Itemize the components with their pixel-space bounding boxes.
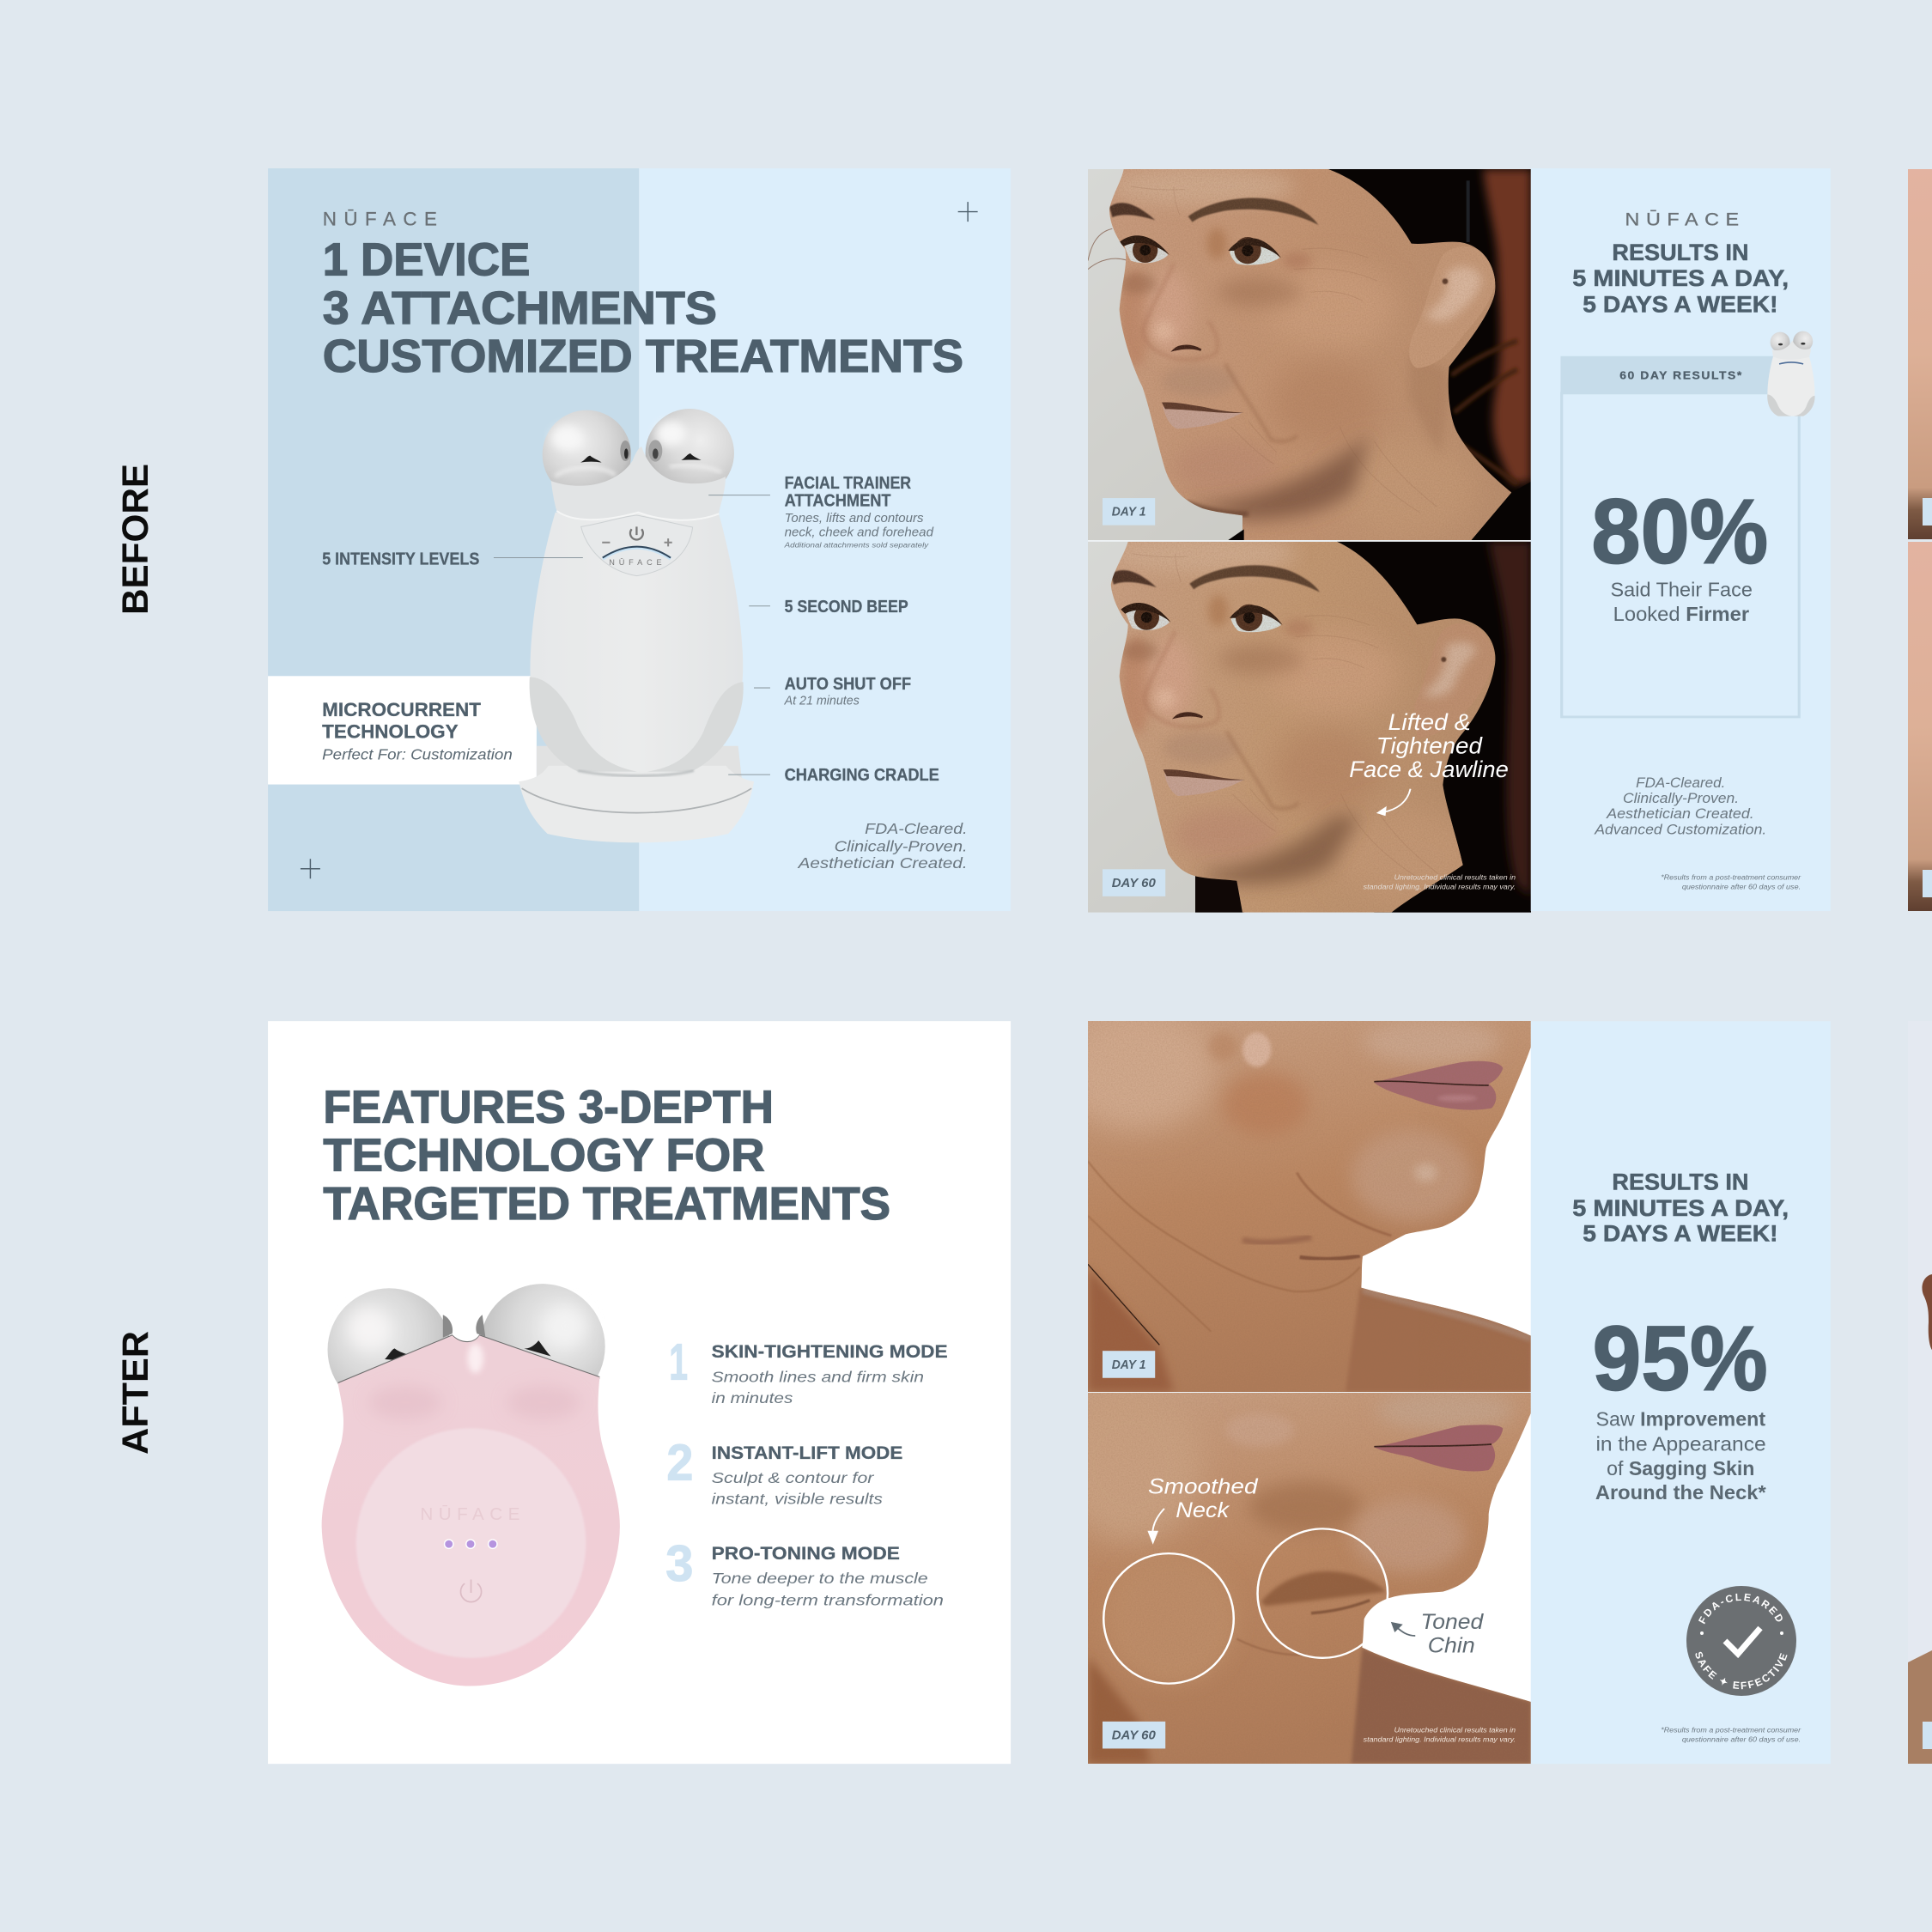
label: facial trainer attachment: neck, cheek and forehead [785, 525, 934, 539]
text: claims [1594, 775, 1766, 837]
logo: NŪFACE [323, 209, 437, 230]
device: pink mini: NŪFACE [420, 1504, 519, 1524]
mode 2: instant, visible results [712, 1491, 883, 1508]
mode 3 [665, 1534, 944, 1608]
circle: chin [1258, 1528, 1388, 1658]
photo: day 60 neck [1060, 1387, 1531, 1764]
label: charging cradle: CHARGING CRADLE [785, 766, 939, 785]
callout: toned chin: Toned [1421, 1609, 1484, 1634]
label: facial trainer attachment: Additional attachments sold separately [783, 540, 929, 549]
text: claims: Clinically-Proven. [1623, 790, 1739, 806]
mode 3: PRO-TONING MODE [712, 1544, 900, 1564]
callout: lifted and tightened: Face & Jawline [1349, 756, 1509, 782]
label: facial trainer attachment: FACIAL TRAINER [785, 474, 912, 493]
stat: 80 percent: 80% [1591, 479, 1768, 582]
label: auto shut off: AUTO SHUT OFF [785, 675, 911, 694]
panel: before photo overlays and sidebar [1103, 168, 1831, 911]
text: fda claims: FDA-Cleared. [865, 820, 968, 837]
heading: RESULTS IN [1612, 240, 1748, 265]
tag: day 60 [1103, 1722, 1165, 1748]
callout: lifted and tightened [1349, 709, 1509, 782]
tag: day 1 [1103, 1351, 1155, 1378]
arrow: to chin [1391, 1622, 1415, 1636]
mode 2: 2 [666, 1434, 693, 1492]
sidebar: 95 percent results [1531, 1021, 1831, 1764]
text: stat caption [1595, 1408, 1766, 1504]
stat: 95 percent: 95% [1593, 1306, 1768, 1409]
label: facial trainer attachment [783, 474, 934, 549]
label: facial trainer attachment: ATTACHMENT [785, 491, 891, 510]
divider behind photos [1088, 169, 1531, 912]
text: footnote [1661, 873, 1801, 890]
panel: cropped next column top photo [1908, 169, 1932, 911]
arrow: to jawline [1376, 789, 1411, 816]
label: before: BEFORE [115, 464, 156, 615]
heading: TARGETED TREATMENTS [323, 1179, 890, 1230]
heading: 5 DAYS A WEEK! [1583, 292, 1778, 318]
panel: before device features [268, 168, 1011, 911]
callout: lifted and tightened: Lifted & [1388, 709, 1471, 735]
mode 1 [669, 1333, 948, 1406]
device: white trainer with cradle [519, 409, 754, 842]
results band [1560, 356, 1800, 393]
callout: smoothed neck: Neck [1176, 1498, 1230, 1522]
mode 2: INSTANT-LIFT MODE [712, 1443, 902, 1463]
callout: toned chin: Chin [1428, 1633, 1475, 1657]
text: fda claims [798, 820, 968, 872]
tag: day 1: DAY 1 [1112, 1358, 1145, 1372]
callout: smoothed neck: Smoothed [1148, 1474, 1259, 1498]
tag: day 60: DAY 60 [1112, 1728, 1156, 1742]
mode 3: Tone deeper to the muscle [712, 1570, 928, 1587]
mode 1: 1 [669, 1333, 688, 1390]
device: small trainer [1767, 331, 1815, 416]
mode 3: 3 [665, 1534, 693, 1592]
heading [1572, 1170, 1789, 1247]
results band: 60 DAY RESULTS* [1619, 369, 1742, 382]
heading [323, 1082, 890, 1230]
label: after: AFTER [115, 1331, 156, 1455]
icon: plus top right [958, 202, 978, 222]
results box [1562, 393, 1799, 717]
label: 5 second beep: 5 SECOND BEEP [785, 598, 908, 617]
text: photo disclaimer: standard lighting. Individual results may vary. [1364, 1735, 1516, 1743]
panel: cropped next column bottom photo [1908, 1021, 1932, 1764]
label: auto shut off: At 21 minutes [784, 694, 860, 708]
heading: 3 ATTACHMENTS [323, 283, 717, 334]
heading: 1 DEVICE [323, 235, 530, 286]
tag: day 1 [1103, 498, 1155, 526]
badge: fda-cleared safe and effective [1686, 1586, 1796, 1696]
divider behind neck photos [1088, 1021, 1531, 1764]
photo: day 1 neck [1060, 1010, 1531, 1392]
text: stat caption [1611, 579, 1753, 626]
callout: lifted and tightened: Tightened [1376, 733, 1483, 758]
text: fda claims: Aesthetician Created. [798, 854, 968, 872]
mode 1: Smooth lines and firm skin [712, 1368, 924, 1385]
heading: FEATURES 3-DEPTH [323, 1082, 774, 1133]
heading [323, 235, 963, 382]
text: claims: FDA-Cleared. [1636, 775, 1725, 791]
text: microcurrent technology: Perfect For: Customization [322, 745, 513, 762]
panel: after device modes [268, 1021, 1011, 1764]
text: stat caption: of Sagging Skin [1607, 1458, 1754, 1480]
circle: neck [1103, 1553, 1234, 1684]
text: footnote: questionnaire after 60 days of use. [1682, 883, 1801, 890]
text: stat caption: Around the Neck* [1595, 1482, 1766, 1504]
heading: 5 MINUTES A DAY, [1572, 265, 1789, 292]
text: microcurrent technology: MICROCURRENT [322, 699, 481, 720]
text: photo disclaimer: Unretouched clinical results taken in [1394, 873, 1516, 881]
heading: 5 MINUTES A DAY, [1572, 1195, 1789, 1222]
text: photo disclaimer [1364, 873, 1516, 890]
tag: day 60: DAY 60 [1112, 877, 1156, 890]
tag: day 1: DAY 1 [1112, 505, 1145, 519]
callout: smoothed neck [1148, 1474, 1259, 1522]
device: white trainer with cradle: NŪFACE [609, 558, 662, 567]
text: stat caption: Looked Firmer [1613, 604, 1749, 626]
text: microcurrent technology: TECHNOLOGY [322, 721, 459, 743]
text: stat caption: Said Their Face [1611, 579, 1753, 601]
heading [1572, 240, 1789, 318]
text: microcurrent technology [322, 699, 513, 762]
photo: day 1 face [1088, 167, 1531, 540]
sidebar: 80 percent results [1531, 168, 1831, 911]
panel: after photo overlays and sidebar [1103, 1021, 1831, 1764]
mode 1: SKIN-TIGHTENING MODE [712, 1342, 948, 1362]
heading: RESULTS IN [1612, 1170, 1748, 1195]
mode 2 [666, 1434, 902, 1508]
text: claims: Advanced Customization. [1594, 821, 1766, 837]
label: facial trainer attachment: Tones, lifts and contours [785, 511, 924, 526]
device: pink mini [322, 1284, 620, 1686]
text: photo disclaimer: standard lighting. Individual results may vary. [1364, 883, 1516, 890]
photo: day 60 face [1088, 533, 1531, 913]
badge: fda-cleared safe and effective: FDA-CLEARED [1698, 1594, 1783, 1625]
mode 2: Sculpt & contour for [712, 1469, 875, 1486]
callout lines [494, 495, 770, 775]
mode 3: for long-term transformation [712, 1591, 944, 1608]
white band [268, 676, 537, 785]
mode 1: in minutes [712, 1389, 793, 1406]
text: footnote: *Results from a post-treatment consumer [1661, 1726, 1801, 1734]
text: footnote: questionnaire after 60 days of use. [1682, 1735, 1801, 1743]
text: photo disclaimer: Unretouched clinical results taken in [1394, 1726, 1516, 1734]
text: claims: Aesthetician Created. [1606, 805, 1754, 822]
badge: fda-cleared safe and effective: SAFE ✦ EFFECTIVE [1695, 1652, 1788, 1690]
heading: CUSTOMIZED TREATMENTS [323, 331, 963, 382]
tag: day 60 [1103, 869, 1165, 896]
text: stat caption: Saw Improvement [1595, 1408, 1765, 1431]
heading: TECHNOLOGY FOR [323, 1131, 765, 1182]
icon: plus bottom left [301, 859, 320, 878]
label: auto shut off [784, 675, 911, 708]
text: stat caption: in the Appearance [1595, 1434, 1766, 1455]
text: photo disclaimer [1364, 1726, 1516, 1743]
text: footnote: *Results from a post-treatment consumer [1661, 873, 1801, 881]
text: footnote [1661, 1726, 1801, 1743]
label: 5 intensity levels: 5 INTENSITY LEVELS [322, 550, 479, 569]
logo: NŪFACE [1625, 210, 1739, 229]
callout: toned chin [1421, 1609, 1484, 1657]
heading: 5 DAYS A WEEK! [1583, 1221, 1778, 1247]
text: fda claims: Clinically-Proven. [835, 838, 968, 855]
arrow: to neck [1147, 1509, 1164, 1545]
